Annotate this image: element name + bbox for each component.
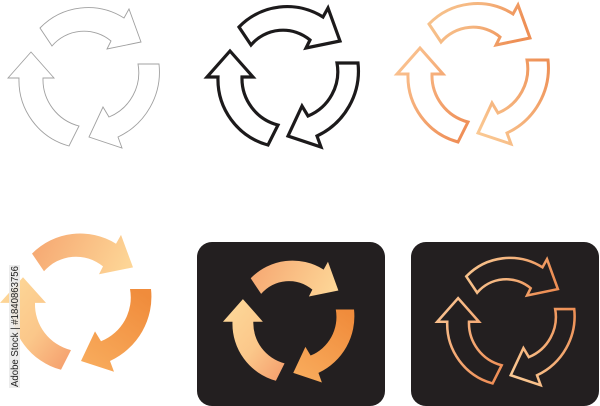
dark panel: outline arrows <box>411 242 599 406</box>
orange gradient outline icon <box>397 4 548 144</box>
stock credit strip: Adobe Stock | #1840863756 <box>10 266 21 387</box>
dark panel: filled arrows <box>197 242 385 406</box>
thin grey outline icon <box>8 8 159 148</box>
icon: filled arrows on dark <box>223 261 354 382</box>
filled orange gradient icon <box>0 233 151 372</box>
icon: outline arrows on dark <box>437 258 575 385</box>
black outline icon <box>207 7 358 147</box>
